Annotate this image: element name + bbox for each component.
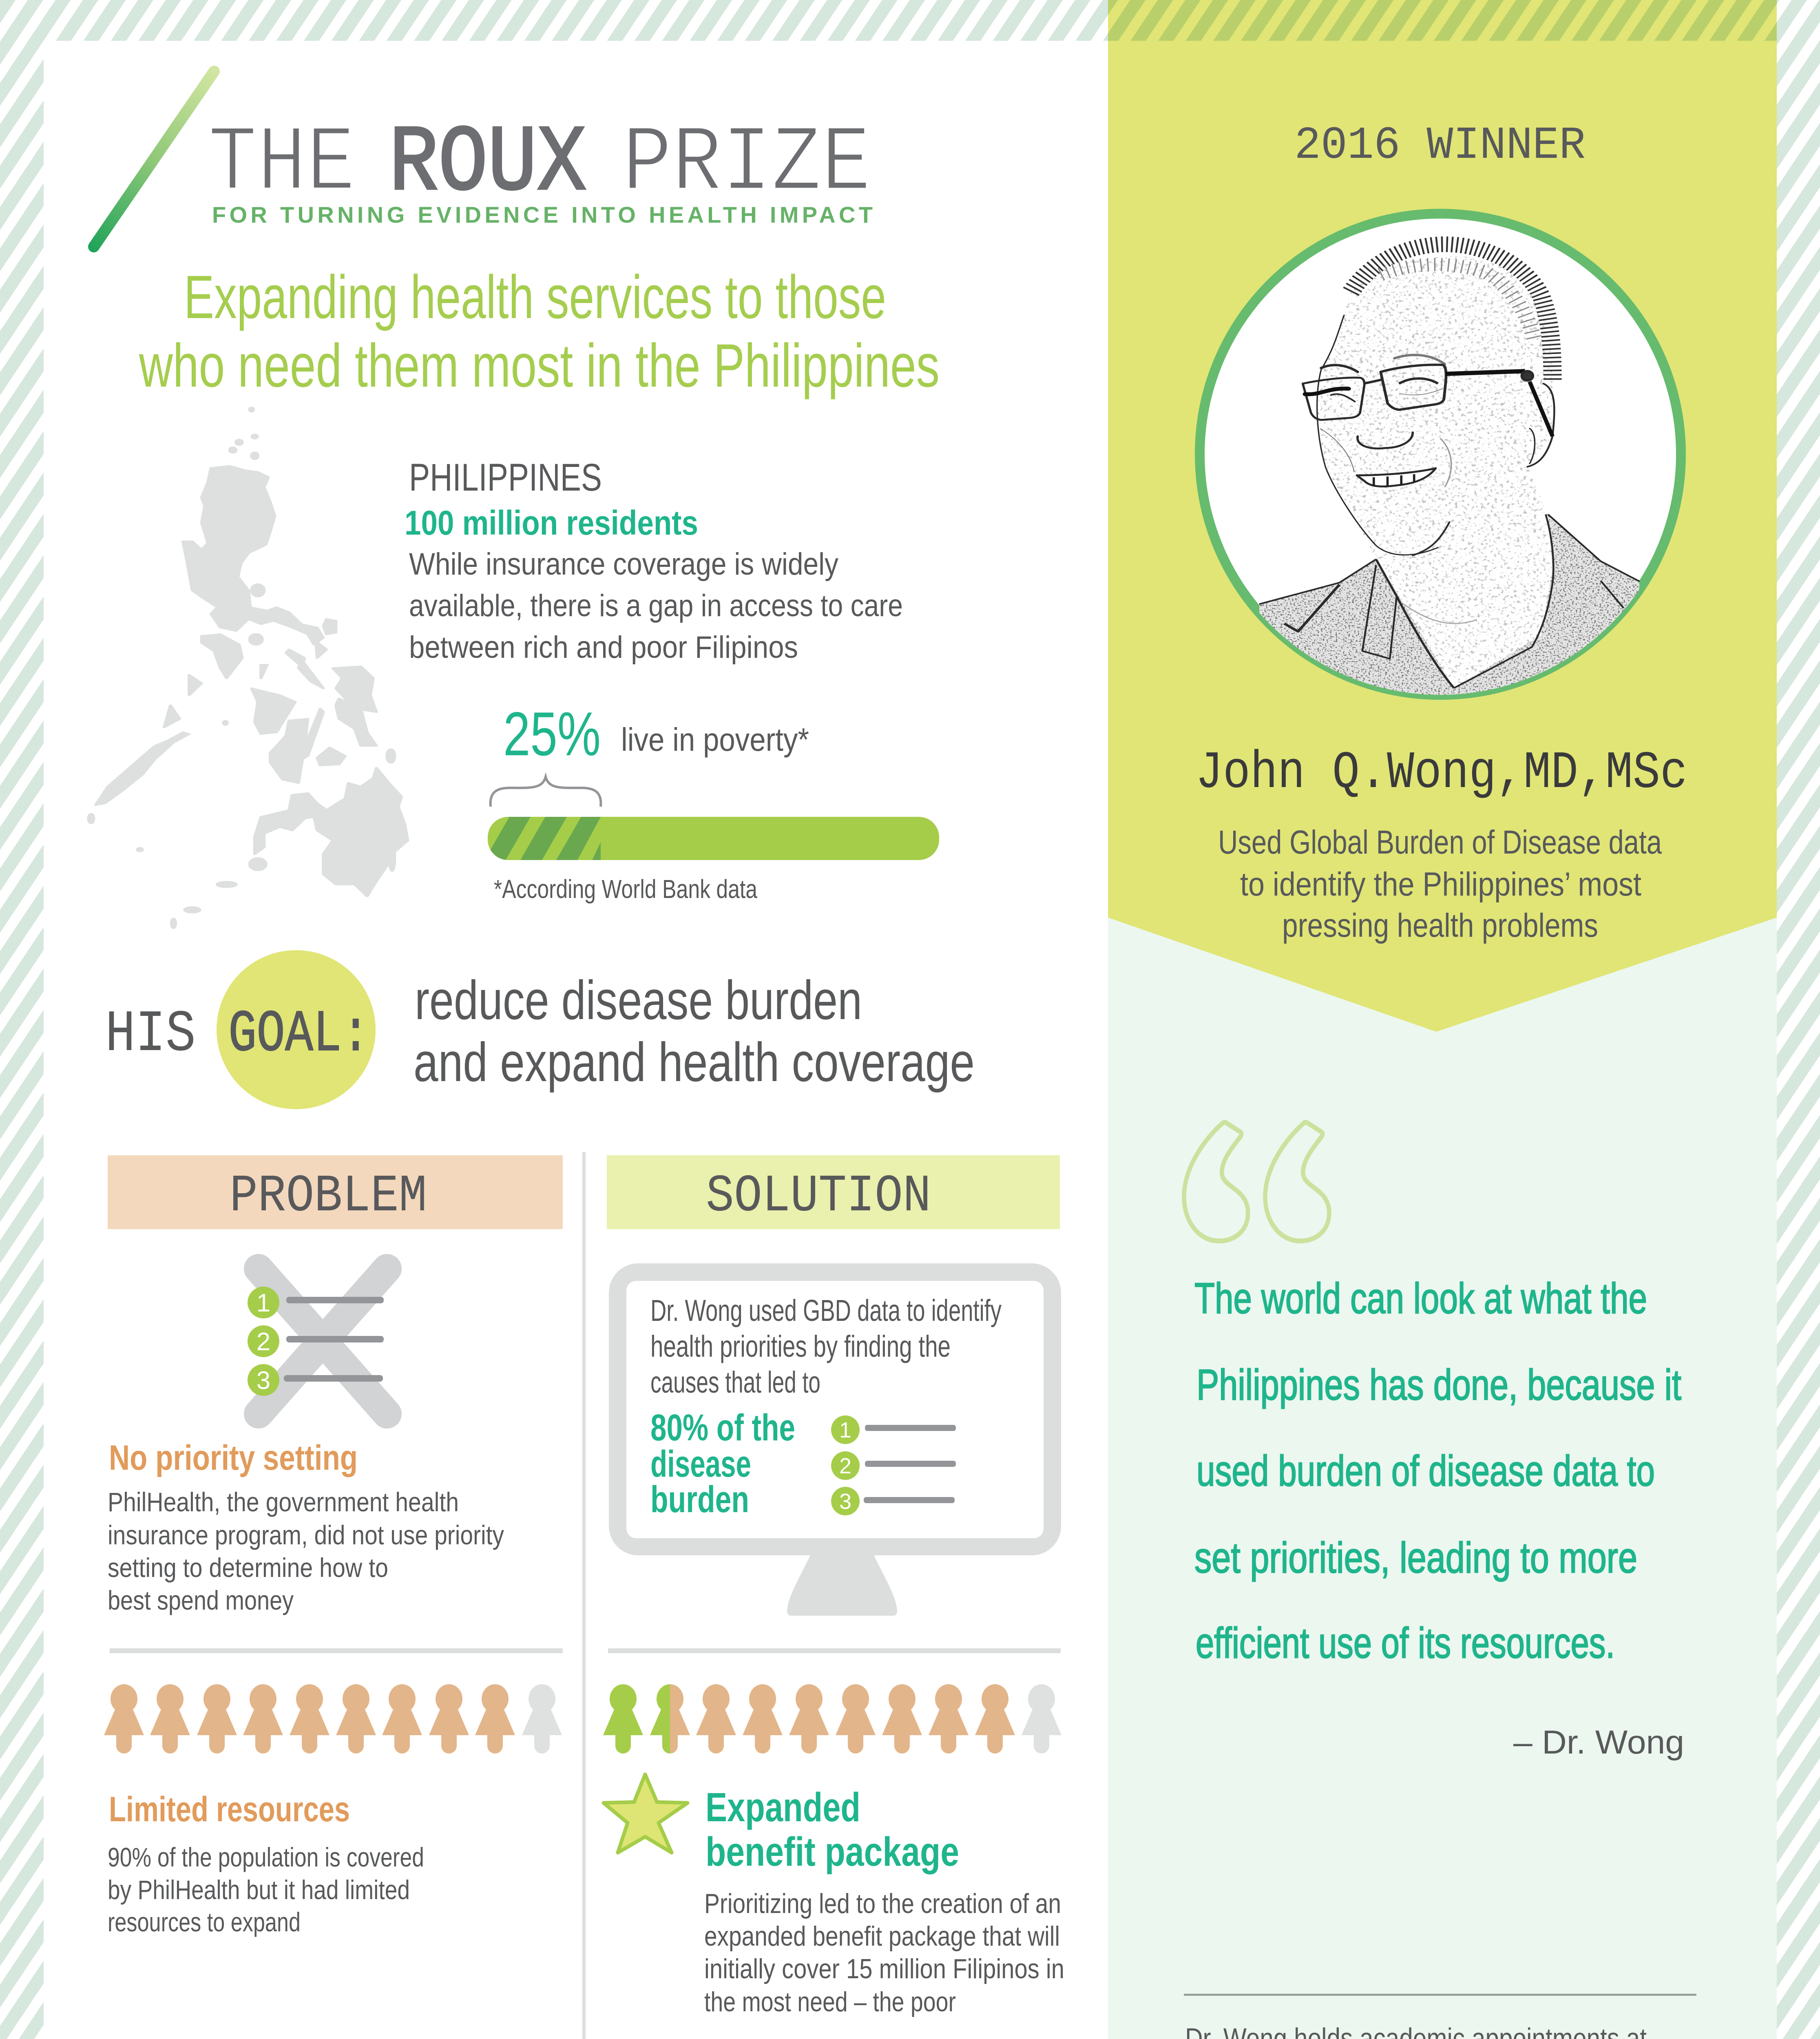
logo word: PRIZE: PRIZE: [622, 111, 871, 217]
smile: [1320, 429, 1354, 471]
no priority setting description: PhilHealth, the government health: [108, 1487, 459, 1517]
eyes: [1305, 389, 1349, 394]
logo word: THE: THE: [208, 111, 356, 217]
no priority setting description: [108, 1487, 504, 1615]
icon: star: [604, 1774, 688, 1853]
monitor text: Dr. Wong used GBD data to identify: [650, 1294, 1002, 1327]
limited resources description: [108, 1842, 424, 1937]
80% of the disease burden: burden: [650, 1479, 749, 1520]
bio divider: [1184, 1994, 1696, 1996]
icon: ranked list: 2: [839, 1454, 851, 1478]
collar and neck: [1376, 559, 1454, 688]
panel: white main content: [44, 41, 1108, 2039]
glasses: [1303, 378, 1364, 420]
quote text: used burden of disease data to: [1196, 1447, 1655, 1495]
brace: [491, 777, 601, 807]
icon: ranked list: [831, 1415, 956, 1515]
logo: The Roux Prize: [94, 71, 873, 247]
80% of the disease burden: 80% of the: [650, 1407, 795, 1449]
no priority setting heading: No priority setting: [109, 1438, 358, 1477]
2016 winner heading: 2016 WINNER: [1294, 120, 1586, 172]
panel: solution: [603, 1155, 1064, 2039]
portrait ring: [1200, 214, 1681, 695]
expanded benefit package heading: benefit package: [705, 1829, 959, 1875]
logo tagline: FOR TURNING EVIDENCE INTO HEALTH IMPACT: [212, 202, 873, 228]
monitor text: [650, 1294, 1002, 1399]
winner description: [1218, 824, 1662, 944]
80% of the disease burden: [650, 1407, 795, 1520]
description: between rich and poor Filipinos: [409, 630, 798, 665]
text block: Philippines facts: [405, 456, 903, 665]
description: [409, 547, 903, 665]
residents figure: 100 million residents: [405, 504, 698, 542]
expanded benefit package heading: [705, 1785, 959, 1875]
sketch of face: [1259, 244, 1640, 710]
limited resources description: 90% of the population is covered: [108, 1842, 424, 1872]
solution header: SOLUTION: [706, 1167, 931, 1226]
neck and face speckle: [1316, 256, 1552, 688]
map: Philippines: [88, 407, 408, 928]
shirt tone: [1259, 514, 1640, 710]
problem header: [108, 1155, 563, 1229]
bar: [488, 817, 939, 860]
limited resources heading: Limited resources: [109, 1790, 350, 1829]
icon: crossed-out priority list: 1: [257, 1289, 270, 1317]
portrait: Dr. John Q. Wong: [1200, 214, 1681, 710]
limited resources description: resources to expand: [108, 1907, 301, 1937]
quote text: [1194, 1274, 1681, 1667]
poverty bar chart: [484, 699, 939, 904]
goal label: HIS: HIS: [105, 1002, 196, 1068]
country label: PHILIPPINES: [409, 456, 602, 499]
icon: crossed-out priority list: [248, 1269, 387, 1414]
icon: monitor: [609, 1263, 1061, 1616]
poverty label: live in poverty*: [621, 721, 809, 758]
nose: [1358, 432, 1413, 449]
icon: crossed-out priority list: 2: [257, 1328, 270, 1356]
winner description: Used Global Burden of Disease data: [1218, 824, 1662, 861]
quote attribution: – Dr. Wong: [1513, 1724, 1684, 1761]
footnote: *According World Bank data: [494, 874, 757, 904]
description: available, there is a gap in access to care: [409, 588, 903, 623]
expanded benefit package description: the most need – the poor: [704, 1986, 956, 2017]
ear: [1527, 384, 1554, 467]
expanded benefit package description: Prioritizing led to the creation of an: [704, 1888, 1061, 1919]
goal statement: [414, 969, 975, 1093]
expanded benefit package description: initially cover 15 million Filipinos in: [704, 1953, 1064, 1984]
limited resources description: by PhilHealth but it had limited: [108, 1875, 410, 1905]
striped 25% section: [484, 817, 601, 860]
quote text: efficient use of its resources.: [1196, 1619, 1615, 1667]
no priority setting description: best spend money: [108, 1585, 294, 1615]
icon: crossed-out priority list: 3: [257, 1367, 270, 1395]
icon row: ten people: [104, 1684, 562, 1754]
panel: problem: [104, 1155, 563, 2039]
goal label: GOAL: GOAL:: [228, 1002, 370, 1068]
column divider: [582, 1152, 586, 2039]
face contour: [1317, 315, 1438, 555]
shirt speckle: [1259, 514, 1640, 710]
description: While insurance coverage is widely: [409, 547, 838, 582]
expanded benefit package heading: Expanded: [705, 1785, 860, 1830]
logo word: ROUX: ROUX: [389, 111, 586, 217]
winner name: John Q.Wong,MD,MSc: [1196, 743, 1687, 803]
no priority setting description: insurance program, did not use priority: [108, 1520, 504, 1550]
goal statement: and expand health coverage: [414, 1031, 975, 1093]
goal statement: reduce disease burden: [415, 969, 862, 1031]
icon: ranked list: 1: [839, 1418, 851, 1442]
quote text: The world can look at what the: [1194, 1274, 1647, 1322]
icon row: ten people, part green: [603, 1684, 1061, 1754]
goal circle: [217, 950, 376, 1109]
his goal: [105, 950, 975, 1109]
divider: [110, 1648, 563, 1653]
panel: pale green quote column: [1108, 0, 1777, 2039]
solution header: [607, 1155, 1060, 1229]
icon: quotation marks: [1184, 1122, 1329, 1241]
monitor text: health priorities by finding the: [650, 1329, 951, 1363]
icon: ranked list: 3: [839, 1489, 851, 1514]
quote text: set priorities, leading to more: [1194, 1534, 1637, 1582]
expanded benefit package description: expanded benefit package that will: [704, 1921, 1060, 1952]
hair: [1351, 244, 1552, 382]
expanded benefit package description: [704, 1888, 1064, 2017]
logo slash: [94, 71, 214, 247]
80% of the disease burden: disease: [650, 1443, 751, 1485]
title: who need them most in the Philippines: [139, 331, 940, 400]
winner description: pressing health problems: [1282, 907, 1598, 944]
panel: yellow winner banner: [1108, 0, 1777, 1032]
quote text: Philippines has done, because it: [1196, 1361, 1681, 1409]
divider: [608, 1648, 1061, 1653]
title: [139, 263, 940, 400]
problem header: PROBLEM: [230, 1167, 427, 1226]
monitor text: causes that led to: [650, 1365, 820, 1399]
no priority setting description: setting to determine how to: [108, 1552, 388, 1583]
winner description: to identify the Philippines’ most: [1240, 866, 1641, 903]
25% figure: 25%: [503, 699, 601, 769]
eyebrows: [1321, 365, 1358, 372]
title: Expanding health services to those: [184, 263, 886, 331]
